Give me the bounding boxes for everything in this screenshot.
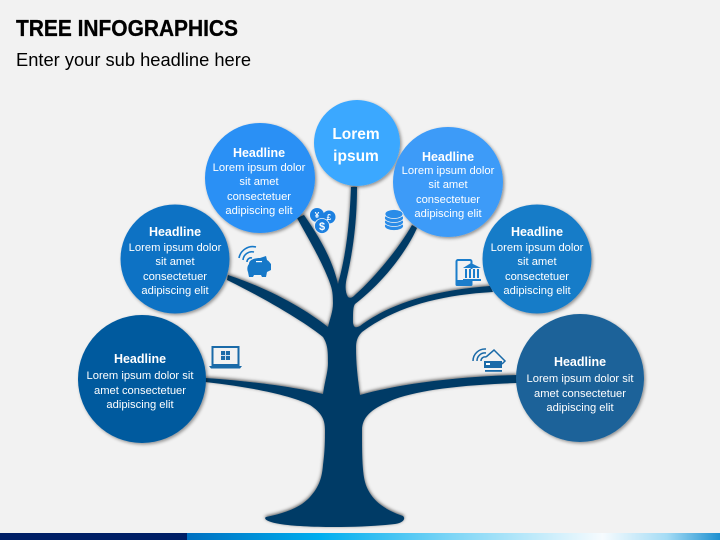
icon: tablet with bank [456, 260, 481, 286]
icon: coin stack [384, 210, 404, 230]
circle: top left: Headline [233, 146, 285, 160]
circle: top right: adipiscing elit [414, 208, 482, 220]
circle: bottom right: adipiscing elit [546, 402, 614, 414]
icon: piggy bank with wifi [239, 247, 271, 277]
circle: top right [393, 127, 503, 237]
circle: bottom left: adipiscing elit [106, 399, 174, 411]
circle: middle right: consectetuer [505, 271, 569, 283]
bottom bar [0, 533, 720, 540]
icon: currency coins: £ [327, 213, 332, 222]
icon: wireless card payment [473, 349, 505, 372]
circle: bottom right: Headline [554, 355, 606, 369]
circle: top left: consectetuer [227, 191, 291, 203]
tree [205, 187, 517, 527]
circle: top right: Headline [422, 150, 474, 164]
circle: top left: Lorem ipsum dolor [213, 162, 306, 174]
icon: currency coins [310, 208, 336, 234]
subtitle: Enter your sub headline here [16, 50, 251, 70]
circle: top left [205, 123, 315, 233]
circle: bottom left: amet consectetuer [94, 385, 186, 397]
circle: bottom left [78, 315, 206, 443]
circle: middle right: Lorem ipsum dolor [491, 242, 584, 254]
circle: middle left: sit amet [155, 256, 195, 268]
title: TREE INFOGRAPHICS [16, 15, 238, 41]
circle: middle left: consectetuer [143, 271, 207, 283]
circle: middle right: Headline [511, 225, 563, 239]
icon: currency coins: ¥ [315, 211, 320, 220]
circle: top right: Lorem ipsum dolor [402, 165, 495, 177]
circle: middle right: adipiscing elit [503, 285, 571, 297]
icon: currency coins: $ [319, 221, 325, 233]
icon: laptop [209, 347, 242, 368]
circle: bottom right: amet consectetuer [534, 388, 626, 400]
circle: middle left [120, 204, 230, 314]
circle: center [314, 100, 400, 186]
circle: bottom right [516, 314, 644, 442]
circle: middle left: adipiscing elit [141, 285, 209, 297]
circle: middle left: Headline [149, 225, 201, 239]
circle: top right: consectetuer [416, 194, 480, 206]
circle: top left: adipiscing elit [225, 205, 293, 217]
circle: middle left: Lorem ipsum dolor [129, 242, 222, 254]
circle: center: Lorem [332, 126, 380, 143]
circle: top right: sit amet [428, 179, 468, 191]
circle: middle right: sit amet [517, 256, 557, 268]
circle: top left: sit amet [239, 176, 279, 188]
circle: middle right [482, 204, 592, 314]
circle: bottom left: Lorem ipsum dolor sit [87, 370, 194, 382]
circle: bottom right: Lorem ipsum dolor sit [527, 373, 634, 385]
circle: bottom left: Headline [114, 352, 166, 366]
circle: center: ipsum [333, 148, 379, 165]
